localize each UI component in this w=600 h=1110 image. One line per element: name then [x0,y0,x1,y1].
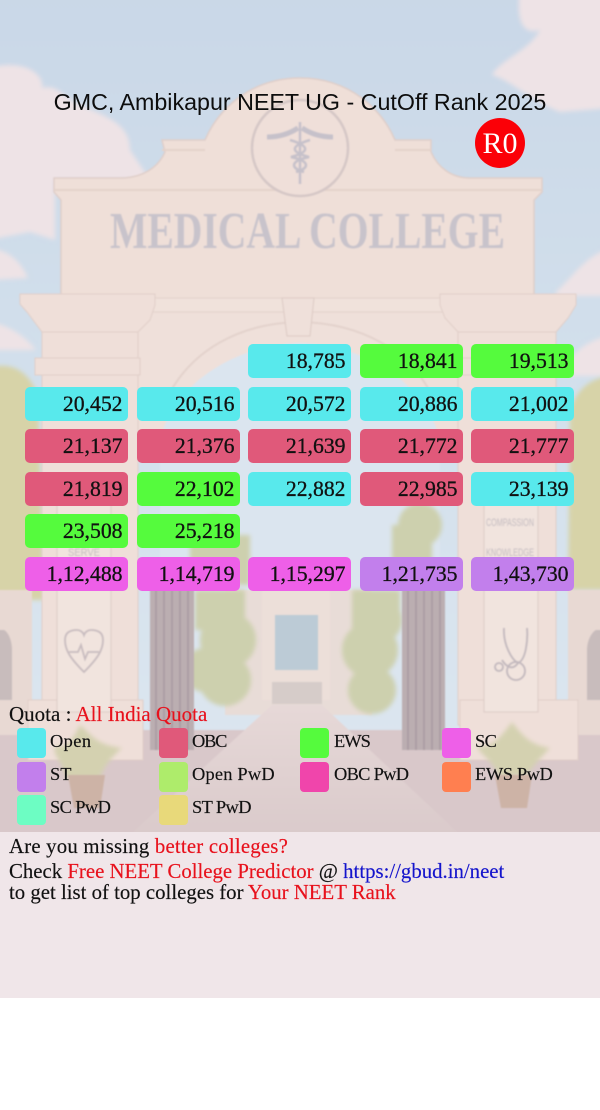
rank cell open [248,387,351,421]
stethoscope icon [495,628,527,680]
rank cell EWS: 18,841 [398,349,458,373]
rank cell EWS: 25,218 [175,519,234,543]
right pillar [440,294,578,760]
rank cell open [471,387,574,421]
rank cell open: 22,882 [286,477,346,501]
rank cell OBC: 21,819 [63,477,122,501]
legend swatch SC PwD [17,795,46,825]
rank cell SC [137,557,240,591]
promo line 3: to get list of top colleges for Your NEET Rank [9,881,396,904]
legend swatch ST [17,762,46,792]
background illustration: medical college gate [0,0,600,832]
rank cell EWS: 19,513 [509,349,568,373]
rank cell EWS [137,472,240,506]
rank cell EWS [137,514,240,548]
legend swatch ST PwD [159,795,188,825]
heart icon [65,630,103,672]
rank cell open: 23,139 [509,477,568,501]
legend swatch EWS PwD [442,762,471,792]
quota heading: Quota : All India Quota [9,702,207,726]
legend label SC: SC [475,731,496,751]
rank cell open [248,344,351,378]
rank cell OBC: 21,777 [509,434,568,458]
legend swatch OBC PwD [300,762,329,792]
legend swatch OBC [159,728,188,758]
rank cell open: 20,572 [286,392,346,416]
legend swatch Open [17,728,46,758]
round badge R0 [475,118,525,168]
rank cell SC [25,557,128,591]
legend label ST PwD: ST PwD [192,797,251,817]
rank cell ST: 1,43,730 [493,562,568,586]
rank cell OBC: 22,985 [398,477,458,501]
rank cell ST [471,557,574,591]
legend label EWS PwD: EWS PwD [475,764,552,784]
arch opening [160,343,440,720]
lintel [140,298,460,312]
rank cell EWS: 23,508 [63,519,122,543]
rank cell SC: 1,12,488 [47,562,122,586]
rank cell open: 20,452 [63,392,122,416]
rank cell OBC [360,472,463,506]
cutoff rank table [25,344,574,591]
rank cell EWS [360,344,463,378]
ground and road [0,730,600,844]
rank cell OBC [248,429,351,463]
rank cell EWS [471,344,574,378]
rank cell ST [360,557,463,591]
pillar inscriptions: KNOWLEDGE [486,547,534,559]
rank cell open [25,387,128,421]
clouds [0,0,600,376]
rank cell OBC [360,429,463,463]
legend label OBC: OBC [192,731,226,751]
rank cell SC: 1,14,719 [159,562,234,586]
inner building [225,590,372,715]
outer wall pieces [0,590,600,735]
pillar inscriptions: SERVE [68,547,100,559]
potted plants [54,722,550,808]
rank cell open [248,472,351,506]
legend swatch SC [442,728,471,758]
gates [150,590,445,750]
legend swatch Open PwD [159,762,188,792]
pillar inscriptions: COMPASSION [486,517,534,529]
promo line 2: Check Free NEET College Predictor @ https://gbud.in/neet [9,860,504,883]
rank cell SC [248,557,351,591]
arch spandrel [130,300,470,440]
rank cell SC: 1,15,297 [270,562,346,586]
rank cell EWS: 22,102 [175,477,234,501]
title: GMC, Ambikapur NEET UG - CutOff Rank 2025 [54,89,546,115]
legend label Open PwD: Open PwD [192,764,275,784]
legend label OBC PwD: OBC PwD [334,764,408,784]
rank cell open: 18,785 [286,349,346,373]
far trees [0,366,600,600]
legend label EWS: EWS [334,731,370,751]
rank cell OBC: 21,772 [398,434,458,458]
rank cell OBC: 21,376 [175,434,234,458]
round badge R0: R0 [482,127,518,160]
pillar inscriptions [68,517,534,559]
legend label Open: Open [50,731,91,751]
legend label SC PwD: SC PwD [50,797,110,817]
rank cell open: 21,002 [509,392,568,416]
rank cell OBC: 21,137 [63,434,122,458]
legend [17,728,552,825]
rank cell OBC [25,472,128,506]
promo panel [0,832,600,998]
legend swatch EWS [300,728,329,758]
pediment and wall [54,78,542,300]
rank cell ST: 1,21,735 [382,562,458,586]
rank cell open: 20,886 [398,392,458,416]
rank cell OBC: 21,639 [286,434,346,458]
rank cell OBC [137,429,240,463]
caduceus emblem [267,122,333,184]
rank cell OBC [25,429,128,463]
rank cell OBC [471,429,574,463]
rank cell open [360,387,463,421]
rank cell open [137,387,240,421]
left pillar [20,294,155,760]
inner trees [183,503,442,714]
legend label ST: ST [50,764,71,784]
rank cell open: 20,516 [175,392,234,416]
rank cell EWS [25,514,128,548]
rank cell open [471,472,574,506]
promo line 1: Are you missing better colleges? [9,835,288,858]
